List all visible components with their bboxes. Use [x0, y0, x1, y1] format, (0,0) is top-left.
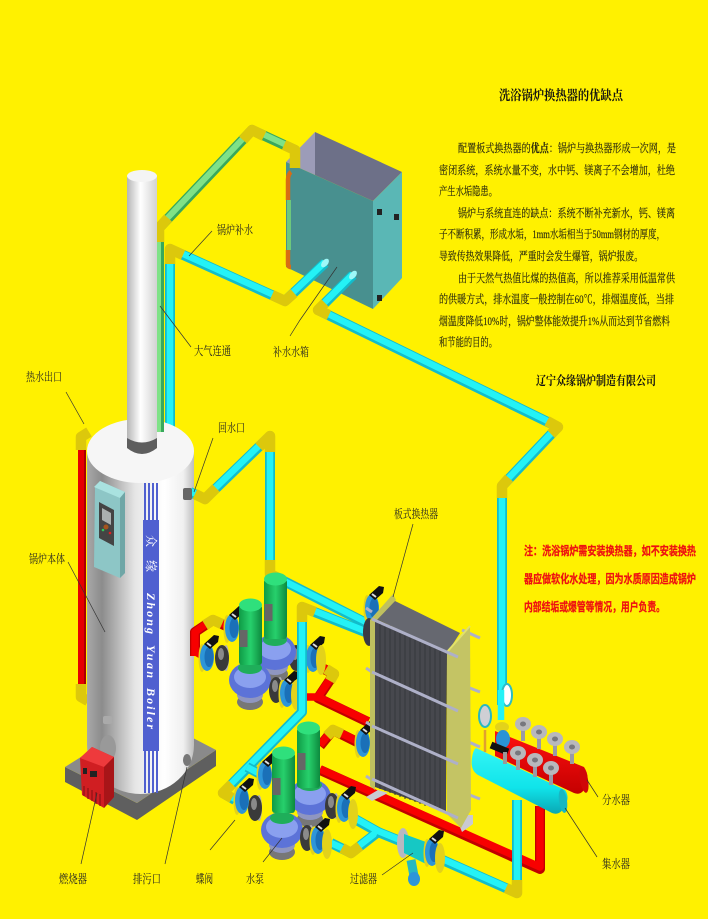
- title: 洗浴锅炉换热器的优缺点: [499, 87, 624, 103]
- return water inlet pipe: [183, 435, 366, 623]
- label: 板式换热器: [393, 506, 438, 597]
- label: 锅炉本体: [29, 551, 105, 632]
- label: 大气连通: 大气连通: [194, 343, 231, 358]
- label: 板式换热器: 板式换热器: [394, 506, 438, 521]
- green vent pipe: [158, 129, 295, 432]
- hot water pipe: [81, 432, 89, 701]
- label: 过滤器: [350, 853, 413, 886]
- cyan collector manifold: [472, 746, 569, 814]
- boiler brand band: 众缘: [144, 535, 159, 572]
- company name: 辽宁众缘锅炉制造有限公司: [536, 373, 656, 388]
- label: 锅炉本体: 锅炉本体: [29, 551, 65, 566]
- label: 回水口: 回水口: [218, 420, 245, 435]
- label: 热水出口: [26, 369, 84, 424]
- cyan pipes lower with filter: [331, 800, 517, 893]
- label: 燃烧器: 燃烧器: [59, 871, 87, 886]
- label: 水泵: 水泵: [246, 871, 264, 886]
- boiler brand band: Zhong: [144, 592, 158, 634]
- red pipes lower: [320, 729, 540, 869]
- control panel: [94, 481, 125, 578]
- boiler brand band: [143, 483, 159, 793]
- plate heat exchanger: [354, 586, 480, 832]
- text block: advantages and disadvantages: [439, 141, 676, 349]
- label: 蝶阀: [196, 820, 235, 886]
- base plate: [65, 738, 216, 820]
- label: 分水器: [587, 780, 630, 807]
- label: 集水器: [565, 808, 630, 871]
- vertical feed valve and gauges: [479, 684, 512, 752]
- label: 分水器: 分水器: [602, 792, 630, 807]
- text block: advantages and disadvantages: 导致传热效果降低，严重时会发生爆管，锅炉报废。: [439, 249, 643, 263]
- label: 热水出口: 热水出口: [26, 369, 62, 384]
- label: 回水口: [194, 420, 245, 492]
- filter: [397, 828, 445, 886]
- label: 集水器: 集水器: [602, 856, 630, 871]
- label: 排污口: 排污口: [133, 871, 161, 886]
- cyan feed pipe: [170, 248, 331, 430]
- red warning note: [524, 543, 696, 614]
- label: 大气连通: [160, 306, 231, 358]
- label: 补水水箱: 补水水箱: [273, 344, 309, 359]
- text block: advantages and disadvantages: 和节能的目的。: [439, 335, 497, 349]
- label: 排污口: [133, 767, 187, 886]
- label: 蝶阀: 蝶阀: [196, 871, 213, 886]
- label: 锅炉补水: 锅炉补水: [217, 222, 253, 237]
- long cyan pipe to system: [318, 269, 558, 705]
- label: 过滤器: 过滤器: [350, 871, 377, 886]
- water tank: [286, 132, 402, 309]
- boiler fittings: [100, 716, 191, 766]
- red pipes upper pump group: [194, 619, 368, 722]
- red distributor manifold: [495, 717, 590, 794]
- label: 水泵: [246, 838, 282, 886]
- label: 锅炉补水: [189, 222, 253, 256]
- lower pump set: [234, 722, 358, 860]
- text block: advantages and disadvantages: 配置板式换热器的优点：锅炉与换热器形成一次网，是: [458, 141, 676, 155]
- upper pump set: [198, 572, 326, 710]
- boiler body: [87, 419, 194, 794]
- label: 补水水箱: [273, 267, 337, 359]
- boiler brand band: Yuan: [144, 645, 158, 678]
- chimney: [127, 170, 157, 454]
- burner: [80, 747, 114, 808]
- second cyan pipe and return line: [223, 606, 365, 800]
- text block: advantages and disadvantages: 产生水垢隐患。: [439, 184, 497, 198]
- boiler brand band: Boiler: [144, 687, 158, 729]
- label: 燃烧器: [59, 793, 97, 886]
